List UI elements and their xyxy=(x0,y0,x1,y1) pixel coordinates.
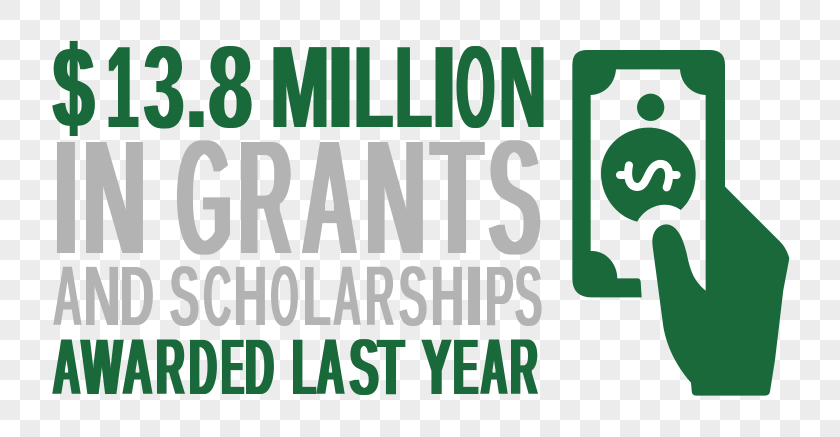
headline: $13.8 million: L xyxy=(396,21,432,154)
headline: $13.8 million: 1 xyxy=(107,21,138,154)
heading: in grants: R xyxy=(239,103,292,293)
subheading: awarded last year: W xyxy=(82,322,122,413)
text: R xyxy=(510,322,537,413)
headline: $13.8 million: 3 xyxy=(144,21,184,154)
heading: in grants: N xyxy=(365,103,426,293)
subheading: and scholarships: I xyxy=(464,248,484,345)
heading: in grants: G xyxy=(177,103,231,293)
heading: in grants: T xyxy=(431,103,483,293)
headline: $13.8 million: $ xyxy=(53,21,94,154)
subheading: awarded last year: E xyxy=(454,322,478,413)
icon: small circle xyxy=(637,94,664,121)
subheading: and scholarships: S xyxy=(170,248,199,345)
subheading: awarded last year: S xyxy=(350,322,378,413)
subheading: and scholarships: H xyxy=(234,248,267,345)
subheading: awarded last year: T xyxy=(378,322,404,413)
subheading: and scholarships: R xyxy=(365,248,394,345)
icon: hand holding a dollar bill xyxy=(572,50,789,396)
subheading: and scholarships: L xyxy=(303,248,331,345)
headline: $13.8 million: I xyxy=(432,21,456,154)
subheading: awarded last year: D xyxy=(245,322,274,413)
subheading: and scholarships: N xyxy=(84,248,120,345)
subheading: and scholarships: P xyxy=(485,248,514,345)
subheading: awarded last year: L xyxy=(292,322,315,413)
subheading: and scholarships: S xyxy=(399,248,427,345)
subheading: and scholarships: O xyxy=(270,248,298,345)
icon: bill outline and hand xyxy=(572,50,789,396)
text: S xyxy=(489,103,540,293)
icon: coin xyxy=(601,128,696,222)
subheading: awarded last year: D xyxy=(190,322,216,413)
headline: $13.8 million: N xyxy=(499,21,546,154)
subheading: awarded last year: R xyxy=(156,322,184,413)
headline: $13.8 million: O xyxy=(456,21,494,154)
subheading: and scholarships: A xyxy=(53,248,82,345)
subheading: awarded last year: A xyxy=(317,322,344,413)
text: S xyxy=(515,248,542,345)
subheading: awarded last year: A xyxy=(53,322,80,413)
subheading: and scholarships: C xyxy=(203,248,231,345)
headline: $13.8 million: I xyxy=(327,21,354,154)
subheading: awarded last year: A xyxy=(481,322,507,413)
headline: $13.8 million: . xyxy=(186,21,207,154)
subheading: and scholarships: D xyxy=(120,248,154,345)
heading: in grants: I xyxy=(54,103,78,293)
subheading: awarded last year: Y xyxy=(422,322,451,413)
subheading: awarded last year: E xyxy=(222,322,244,413)
headline: $13.8 million: M xyxy=(271,21,329,154)
headline: $13.8 million: L xyxy=(354,21,393,154)
heading: in grants: A xyxy=(302,103,357,293)
subheading: and scholarships: A xyxy=(333,248,361,345)
icon: dollar symbol xyxy=(620,164,677,187)
subheading: and scholarships: H xyxy=(431,248,464,345)
headline: $13.8 million: 8 xyxy=(209,21,252,154)
subheading: awarded last year: A xyxy=(123,322,152,413)
heading: in grants: N xyxy=(83,103,146,293)
